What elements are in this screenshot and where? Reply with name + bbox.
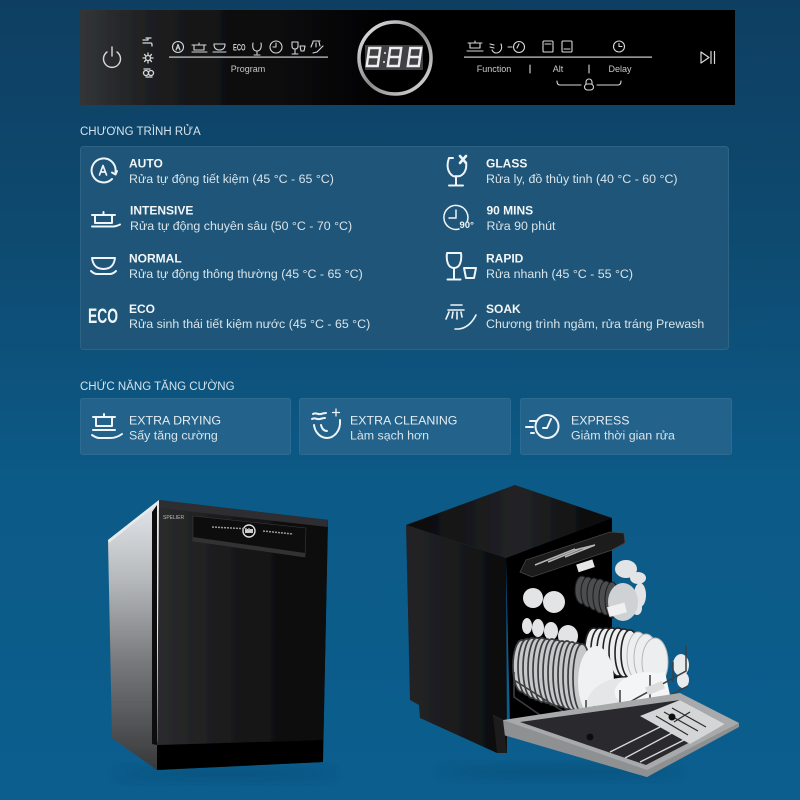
- label: brand: SPELIER: [163, 515, 185, 521]
- function icons: [467, 41, 624, 53]
- lower rear plates: [585, 628, 668, 686]
- label: ECO panel icon: ECO: [233, 42, 246, 54]
- program: eco: [88, 302, 370, 331]
- door edge: [152, 505, 157, 745]
- upper rack dishes: [522, 560, 646, 647]
- side panel: [108, 500, 159, 770]
- program: normal: NORMAL: [129, 252, 182, 266]
- front white plate stack: [582, 667, 670, 735]
- panel: programs: [80, 146, 728, 350]
- front body: [157, 500, 328, 770]
- program: glass: Rửa ly, đồ thủy tinh (40 °C - 60 °C): [486, 172, 678, 186]
- program: 90 mins: Rửa 90 phút: [486, 219, 556, 233]
- program: rapid: RAPID: [486, 252, 524, 266]
- label: program: Program: [231, 64, 265, 74]
- separators and lock: [530, 65, 621, 90]
- cutlery tray: [520, 532, 625, 577]
- card: express: Giảm thời gian rửa: [571, 428, 675, 442]
- program: glass: [448, 156, 678, 186]
- program: 90 mins: 90°: [460, 220, 474, 231]
- dishwasher closed: [108, 500, 335, 780]
- program: 90 mins: [444, 204, 556, 233]
- card: extra cleaning: [300, 398, 510, 454]
- cabinet top: [406, 485, 612, 558]
- upper rack plates: [575, 576, 638, 621]
- icon: status indicators: [143, 38, 154, 77]
- label plate lower: [645, 681, 665, 695]
- program: auto: Rửa tự động tiết kiệm (45 °C - 65 °C): [129, 172, 334, 186]
- card: express: EXPRESS: [571, 414, 630, 428]
- function line: [464, 56, 652, 58]
- heading: programs: CHƯƠNG TRÌNH RỬA: [80, 125, 201, 138]
- program: eco: Rửa sinh thái tiết kiệm nước (45 °C - 65 °C): [129, 317, 370, 331]
- program: eco: ECO: [129, 302, 155, 316]
- program: auto: [92, 156, 334, 186]
- label: delay: Delay: [608, 64, 632, 74]
- cabinet side: [406, 525, 507, 753]
- lower front plates: [513, 638, 614, 718]
- label: alt: Alt: [553, 64, 564, 74]
- control panel: [80, 10, 735, 105]
- program: intensive: INTENSIVE: [130, 204, 193, 218]
- program line: [169, 56, 328, 58]
- program: glass: GLASS: [486, 156, 527, 170]
- card: extra cleaning: Làm sạch hơn: [350, 428, 429, 442]
- card: extra drying: Sấy tăng cường: [129, 428, 218, 442]
- card: extra drying: [80, 398, 290, 454]
- card: express: [520, 398, 732, 454]
- program: eco: ECO: [88, 305, 118, 328]
- program: soak: Chương trình ngâm, rửa tráng Prewash: [486, 317, 704, 331]
- program: normal: Rửa tự động thông thường (45 °C - 65 °C): [129, 267, 363, 281]
- lower right bowls: [673, 654, 689, 688]
- program: soak: [446, 302, 704, 331]
- interior: [506, 518, 640, 725]
- program: 90 mins: 90 MINS: [486, 204, 533, 218]
- label plate upper: [607, 603, 627, 617]
- program: rapid: Rửa nhanh (45 °C - 55 °C): [486, 267, 633, 281]
- icon: start pause: [701, 52, 714, 64]
- display ring: [359, 22, 431, 94]
- program: intensive: Rửa tự động chuyên sâu (50 °C - 70 °C): [130, 219, 352, 233]
- program: rapid: [447, 252, 633, 281]
- program: normal: [91, 252, 363, 281]
- program: intensive: [92, 204, 352, 233]
- open door: [497, 693, 739, 777]
- rack wire: [514, 646, 688, 742]
- card: extra cleaning: EXTRA CLEANING: [350, 414, 457, 428]
- dishwasher open: [406, 485, 739, 778]
- control strip: [193, 516, 306, 557]
- program: soak: SOAK: [486, 302, 521, 316]
- icon: power button: [104, 47, 120, 67]
- heading: extra functions: CHỨC NĂNG TĂNG CƯỜNG: [80, 380, 235, 393]
- program icons: [172, 41, 323, 55]
- label: function: Function: [477, 64, 511, 74]
- card: extra drying: EXTRA DRYING: [129, 414, 221, 428]
- program: auto: AUTO: [129, 156, 163, 170]
